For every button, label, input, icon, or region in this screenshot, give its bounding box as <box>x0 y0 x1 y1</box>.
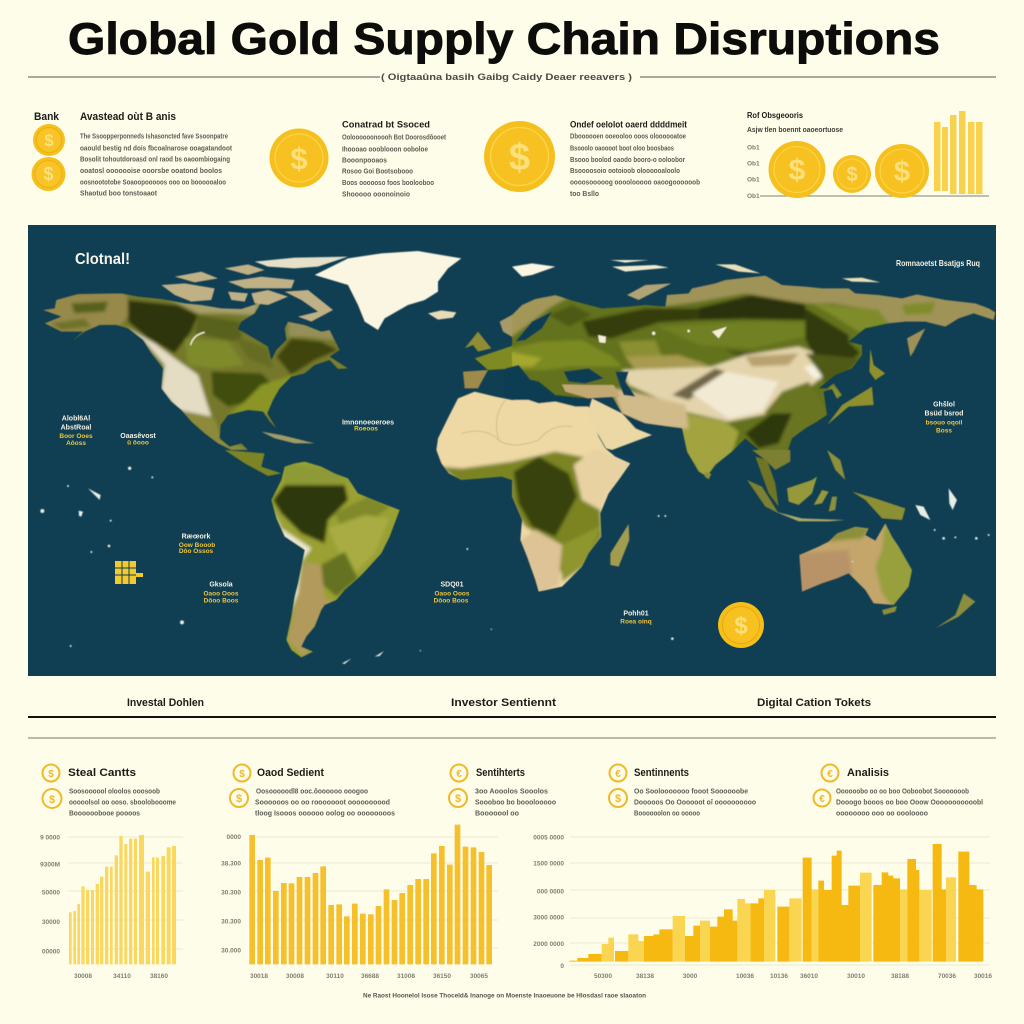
icon: ring top <box>822 764 838 782</box>
y axis labels: 0005 0000 <box>533 834 564 842</box>
text block: Ihoooao oooblooon ooboloe <box>342 144 428 154</box>
section labels: Investal Dohlen <box>127 697 204 709</box>
pacific islets <box>658 488 990 640</box>
axis labels: Ob1 <box>747 144 760 152</box>
map label: south pacific two <box>203 582 239 604</box>
map label: title: Clotnal! <box>75 251 130 268</box>
map label: south pacific one <box>179 534 215 555</box>
map label: south atlantic: Oaoo Ooos <box>434 590 470 598</box>
north america <box>28 251 515 458</box>
heading: Analisis <box>847 767 889 779</box>
map label: indian ocean: Roea oinq <box>620 618 652 626</box>
map label: south atlantic <box>434 582 470 604</box>
y axis labels: 38.300 <box>221 860 241 868</box>
text block: Oo Soolooooooo fooot Soooooobe <box>634 786 748 796</box>
y axis labels: 00000 <box>42 948 60 956</box>
text block: Booooool oo <box>475 808 519 818</box>
map label: east asia: bsouo oqoil <box>926 420 963 426</box>
icon: map coin <box>718 602 764 648</box>
map label: pacific central: Oaasêvost <box>120 433 156 440</box>
y axis labels: 1500 0000 <box>533 860 564 868</box>
text block: Rosoo Goi Bootsobooo <box>342 166 413 176</box>
map label: atlantic: Roeoos <box>354 426 378 432</box>
axis labels <box>747 144 760 200</box>
text block: Soosoooool oloolos ooosoob <box>69 786 160 796</box>
y axis labels: 9 0000 <box>40 834 60 842</box>
arabia <box>587 398 652 450</box>
x axis labels: 36688 <box>361 973 379 980</box>
y axis labels <box>221 834 241 954</box>
y axis labels <box>533 834 564 970</box>
x axis labels: 30010 <box>847 973 865 980</box>
axis labels: Ob1 <box>747 160 760 168</box>
y axis labels <box>40 834 60 956</box>
arctic islands <box>161 264 333 322</box>
text block: Boooooobooe poooos <box>69 808 140 818</box>
text block: ooooolsol oo ooso. sboolobooome <box>69 798 176 806</box>
icon: small coin bottom <box>32 157 66 191</box>
heading: bank: Bank <box>34 111 60 123</box>
text block: Bosolit tohoutdoroasd onl raod bs oaoombiogaing <box>80 154 230 164</box>
western europe <box>465 332 491 352</box>
y axis labels: 2000 0000 <box>533 941 564 948</box>
axis labels: Ob1 <box>747 176 760 184</box>
map label: east asia: Bsüd bsrod <box>925 410 963 418</box>
icon: ring top: $ <box>48 769 54 780</box>
map label: atlantic: Imnonoeoeroes <box>342 420 394 426</box>
text block: ooatosl ooooooise ooorsbe ooatond boolos <box>80 166 222 175</box>
map label: indian ocean: Pohh01 <box>623 610 649 618</box>
text block: oooooooo ooo oo oooloooo <box>836 808 928 818</box>
icon: coin three: $ <box>894 156 910 188</box>
icon: coin two <box>833 155 871 193</box>
x axis labels: 3000 <box>683 973 698 980</box>
icon: ring top: € <box>456 769 462 780</box>
australia <box>798 523 912 606</box>
icon: ring bottom <box>609 789 627 807</box>
x axis labels: 31008 <box>397 973 415 980</box>
y axis labels: 30.000 <box>221 948 241 954</box>
text block: Dooogo booos oo boo Ooow Ooooooooooobl <box>836 798 983 806</box>
panel: central coin and text <box>270 120 446 198</box>
map label: south atlantic: Dôoo Boos <box>434 598 469 604</box>
icon: ring top <box>610 764 626 782</box>
panel: sentihterts <box>449 764 556 818</box>
panel: sentinnents <box>609 764 756 818</box>
x axis labels: 10036 <box>736 973 754 980</box>
icon: coin one: $ <box>789 154 806 187</box>
icon: coin three <box>875 144 929 198</box>
africa, southeast asia, oceania <box>432 387 990 640</box>
map label: atlantic <box>342 420 394 432</box>
axis labels: Ob1 <box>747 193 760 200</box>
y axis labels: 000 0000 <box>537 888 564 896</box>
subtitle: ( Oigtaaûna basih Gaibg Caidy Deaer reeavers ) <box>381 72 632 82</box>
map label: pacific central <box>120 433 156 446</box>
x axis labels <box>74 973 168 980</box>
icon: coin two: $ <box>846 164 858 186</box>
x axis labels: 36150 <box>433 973 451 980</box>
footer note: Ne Raost Hoonelol Isose Thoceld& Inanoge on Moenste lnaoeuone be Hlosdasl raoe slaoaton <box>363 992 646 1000</box>
light bars <box>602 873 956 962</box>
map land <box>28 251 1005 664</box>
map label: east asia <box>925 402 963 434</box>
text block <box>342 132 446 198</box>
x axis labels: 30110 <box>326 973 344 980</box>
y axis labels: 9300M <box>40 862 60 868</box>
map label: indian ocean <box>620 610 652 626</box>
icon: ring bottom: $ <box>455 793 461 805</box>
icon: yellow table <box>115 561 143 584</box>
map label: east asia: Boss <box>936 428 952 434</box>
text block: Bsooo boolod oaodo booro-o ooloobor <box>570 155 685 164</box>
heading: Oaod Sedient <box>257 767 324 779</box>
y axis labels: 30.300 <box>221 890 241 896</box>
map label: south pacific two: Gksola <box>209 582 233 588</box>
section labels: Investor Sentiennt <box>451 697 556 709</box>
icon: coin one <box>768 141 826 198</box>
text block: Oosooooodl8 ooc.ôoooooo ooogoo <box>256 786 368 796</box>
text block: oooosooooog oooolooooo oaoogoooooob <box>570 178 700 186</box>
icon: ring top: $ <box>239 769 245 780</box>
icon: small coin top: $ <box>44 131 54 150</box>
text block: Dooooos Oo Oooooot oî oooooooooo <box>634 798 756 806</box>
chart: gold bars centre <box>221 825 498 980</box>
map label: east asia: Ghšlol <box>933 402 955 408</box>
text block: Bsoooosoio ootoioob oloooooaloolo <box>570 166 680 175</box>
text block: too Bsllo <box>570 189 599 198</box>
map label: south pacific one: Ræœork <box>182 534 210 540</box>
map label: pacific north: Boor Ooes <box>59 433 93 440</box>
map label: pacific north: Alobl6Al <box>62 416 90 422</box>
y axis labels: 0000 <box>227 834 241 841</box>
x axis labels: 30016 <box>974 973 992 980</box>
icon: ring bottom: $ <box>236 793 242 805</box>
x axis labels: 70036 <box>938 973 956 980</box>
heading: Rof Obsgeooris <box>747 111 804 120</box>
text block <box>634 786 756 818</box>
heading: Sentinnents <box>634 767 689 779</box>
panel: world map <box>28 225 1005 676</box>
text block: Oooooobo oo oo boo Ooboobot Sooooooob <box>836 786 969 796</box>
text block <box>570 132 700 198</box>
heading: analysis: Avastead oùt B anis <box>80 111 176 123</box>
text block: Bsooolo oaoooot boot oloo boosbaos <box>570 144 674 152</box>
x axis labels: 50300 <box>594 973 612 980</box>
icon: small coin bottom: $ <box>43 164 54 184</box>
y axis labels: 0 <box>560 963 564 970</box>
text block: Dboooooen ooeooloo ooos oloooooatoe <box>570 132 686 140</box>
heading: Steal Cantts <box>68 767 136 779</box>
bars <box>69 835 176 964</box>
heading: Sentihterts <box>476 767 525 779</box>
icon: ring bottom: € <box>819 794 825 805</box>
x axis labels: 30018 <box>250 973 268 980</box>
section labels: Digital Cation Tokets <box>757 697 871 709</box>
turkey <box>562 384 620 398</box>
text block: oosnoototobe Soaoopooooos ooo oo boooooaloo <box>80 178 226 186</box>
panel: third coin and text <box>484 120 700 198</box>
icon: ring bottom: $ <box>49 794 55 806</box>
south america <box>40 450 492 664</box>
map label: south pacific two: Oaoo Ooos <box>203 590 239 598</box>
y axis labels: 50000 <box>42 890 60 896</box>
icon: largest coin: $ <box>509 137 530 179</box>
title: Global Gold Supply Chain Disruptions <box>68 15 940 64</box>
icon: map coin: $ <box>734 612 748 640</box>
x axis labels <box>250 973 488 980</box>
icon: large coin <box>270 128 328 188</box>
map label: south pacific one: Dôo Ossos <box>179 548 214 555</box>
text block: Soooboo bo booolooooo <box>475 798 556 806</box>
x axis labels: 30008 <box>286 973 304 980</box>
text block: 3oo Aooolos Sooolos <box>475 786 548 796</box>
x axis labels: 38188 <box>891 973 909 980</box>
dark bars <box>569 844 983 962</box>
icon: small coin top <box>33 124 65 156</box>
chart: stepped bars right <box>533 834 992 980</box>
x axis labels: 10136 <box>770 973 788 980</box>
icon: ring bottom <box>814 790 830 806</box>
text block <box>69 786 176 818</box>
seas <box>505 312 645 429</box>
panel: oaod sedient <box>230 764 395 818</box>
text block <box>80 132 232 198</box>
icon: ring bottom: $ <box>615 793 621 805</box>
icon: ring top: € <box>827 769 833 780</box>
map label: south pacific two: Dôoo Boos <box>204 598 239 604</box>
heading: Ondef oelolot oaerd ddddmeit <box>570 120 688 130</box>
x axis labels: 38160 <box>150 973 168 980</box>
text block: Boos oooooso foos boolooboo <box>342 178 434 187</box>
bars <box>934 111 982 194</box>
x axis labels <box>594 973 992 980</box>
text block: The Ssoopperponneds Ishasoncted fave Ssoonpatre <box>80 132 228 140</box>
icon: ring top: € <box>615 769 621 780</box>
panel: coin bar chart <box>747 111 989 200</box>
greenland <box>315 251 461 330</box>
x axis labels: 38138 <box>636 973 654 980</box>
map label: south pacific one: Oow Booob <box>179 542 215 549</box>
chart: pale bars left <box>40 834 183 980</box>
text block: Ooloooooonoooh Bot Doorosdôooet <box>342 132 446 142</box>
y axis labels: 3000 0000 <box>533 914 564 922</box>
text block: Soooooos oo oo rooooooot oooooooood <box>255 798 390 806</box>
map label: south atlantic: SDQ01 <box>441 582 464 588</box>
text block <box>255 786 395 818</box>
iceland <box>428 310 456 320</box>
text block: Shaotud boo tonstoaaot <box>80 188 157 198</box>
subheading: Asjw tlen boennt oaoeortuose <box>747 125 843 134</box>
y axis labels: 30.300 <box>221 918 241 926</box>
x axis labels: 30065 <box>470 973 488 980</box>
map label: top right: Romnaoetst Bsatjgs Ruq <box>896 258 980 268</box>
text block: Booonpooaos <box>342 156 387 164</box>
panel: analisis <box>814 764 983 818</box>
text block: oaould bestig nd dois fbcoalnarose ooagatandoot <box>80 144 232 152</box>
icon: largest coin <box>484 121 555 192</box>
text block: Shooooo ooonoinoio <box>342 190 410 198</box>
y axis labels: 30000 <box>42 919 60 926</box>
panel: bank coins and text <box>32 111 232 198</box>
x axis labels: 34110 <box>113 973 131 980</box>
map label: pacific central: ü ôooo <box>127 440 149 446</box>
map label: pacific north: Aôoss <box>66 440 86 447</box>
icon: ring top <box>234 764 250 782</box>
x axis labels: 36010 <box>800 973 818 980</box>
panel: steal cants <box>42 764 176 818</box>
text block: tloog Isooos oooooo oolog oo oooooooos <box>255 808 395 818</box>
text block: Boooooolon oo ooooo <box>634 808 700 818</box>
eurasia <box>505 260 1005 485</box>
bars <box>249 825 492 964</box>
x axis labels: 30008 <box>74 973 92 980</box>
map label: pacific north <box>59 416 93 447</box>
icon: large coin: $ <box>290 141 308 176</box>
heading: Conatrad bt Ssoced <box>342 120 430 130</box>
map label: pacific north: AbstRoal <box>61 424 91 432</box>
text block <box>836 786 983 818</box>
section labels <box>127 697 871 709</box>
text block <box>475 786 556 818</box>
icon: ring bottom <box>230 789 248 807</box>
